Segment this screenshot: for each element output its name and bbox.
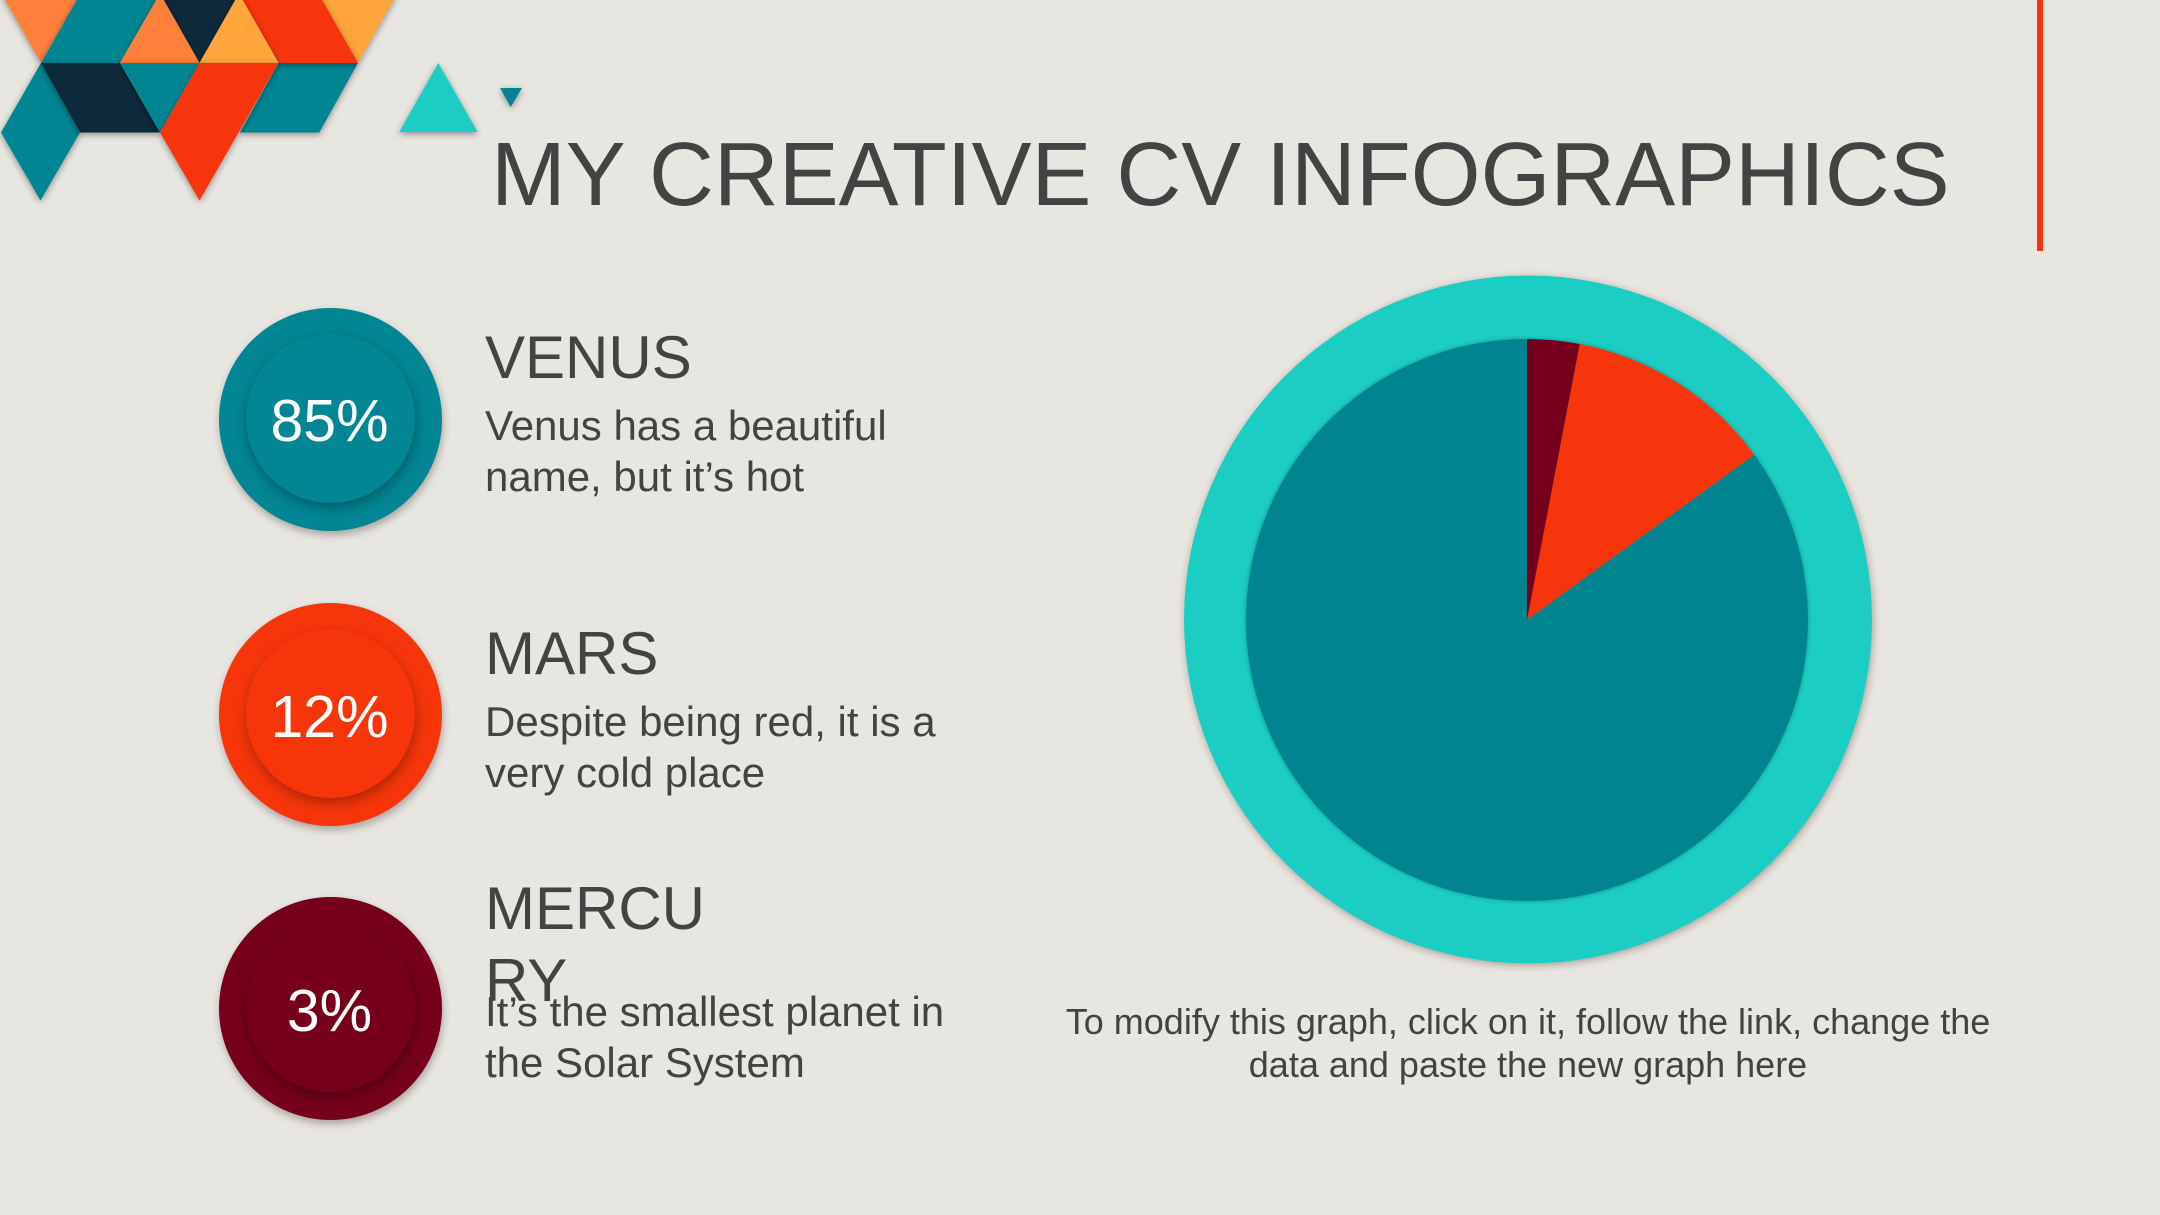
badge: Mars 12%	[219, 603, 442, 826]
heading: Mercury: RY	[485, 947, 567, 1014]
slice: Mars 12%	[1527, 344, 1754, 620]
text: Mars description: very cold place	[485, 748, 765, 796]
text: Venus description: Venus has a beautiful	[485, 402, 887, 449]
chart ring	[1184, 276, 1872, 964]
badge: Venus 85%: 85%	[270, 388, 389, 454]
title: MY CREATIVE CV INFOGRAPHICS	[491, 124, 1950, 224]
text: Mars description: Despite being red, it is a	[485, 698, 936, 745]
text: Mars description	[485, 698, 936, 796]
badge: Mars 12%: 12%	[270, 684, 389, 750]
icon: small teal triangle	[498, 86, 524, 110]
accent line	[2037, 0, 2043, 251]
slice: Mercury 3%	[1527, 339, 1580, 620]
badge: Mercury 3%: 3%	[287, 978, 372, 1044]
chart slices	[1246, 339, 1808, 901]
heading: Mercury: MERCU	[485, 875, 705, 942]
decorative triangle mosaic	[0, 0, 399, 204]
slice: Venus 85%	[1246, 339, 1808, 901]
text: Mercury description: the Solar System	[485, 1038, 805, 1086]
badge: Venus 85%	[219, 308, 442, 531]
text: Mercury description	[485, 988, 944, 1086]
chart caption	[1066, 1001, 1990, 1085]
heading: Mercury	[485, 875, 705, 1014]
text: Venus description: name, but it’s hot	[485, 452, 804, 500]
chart caption: To modify this graph, click on it, follow the link, change the	[1066, 1001, 1990, 1042]
icon: large turquoise triangle	[397, 63, 480, 138]
text: Venus description	[485, 402, 887, 500]
text: Mercury description: It’s the smallest planet in	[485, 988, 944, 1035]
heading: Venus: VENUS	[485, 324, 692, 391]
chart caption: data and paste the new graph here	[1249, 1044, 1807, 1085]
heading: Mars: MARS	[485, 620, 658, 687]
badge: Mercury 3%	[219, 897, 442, 1120]
